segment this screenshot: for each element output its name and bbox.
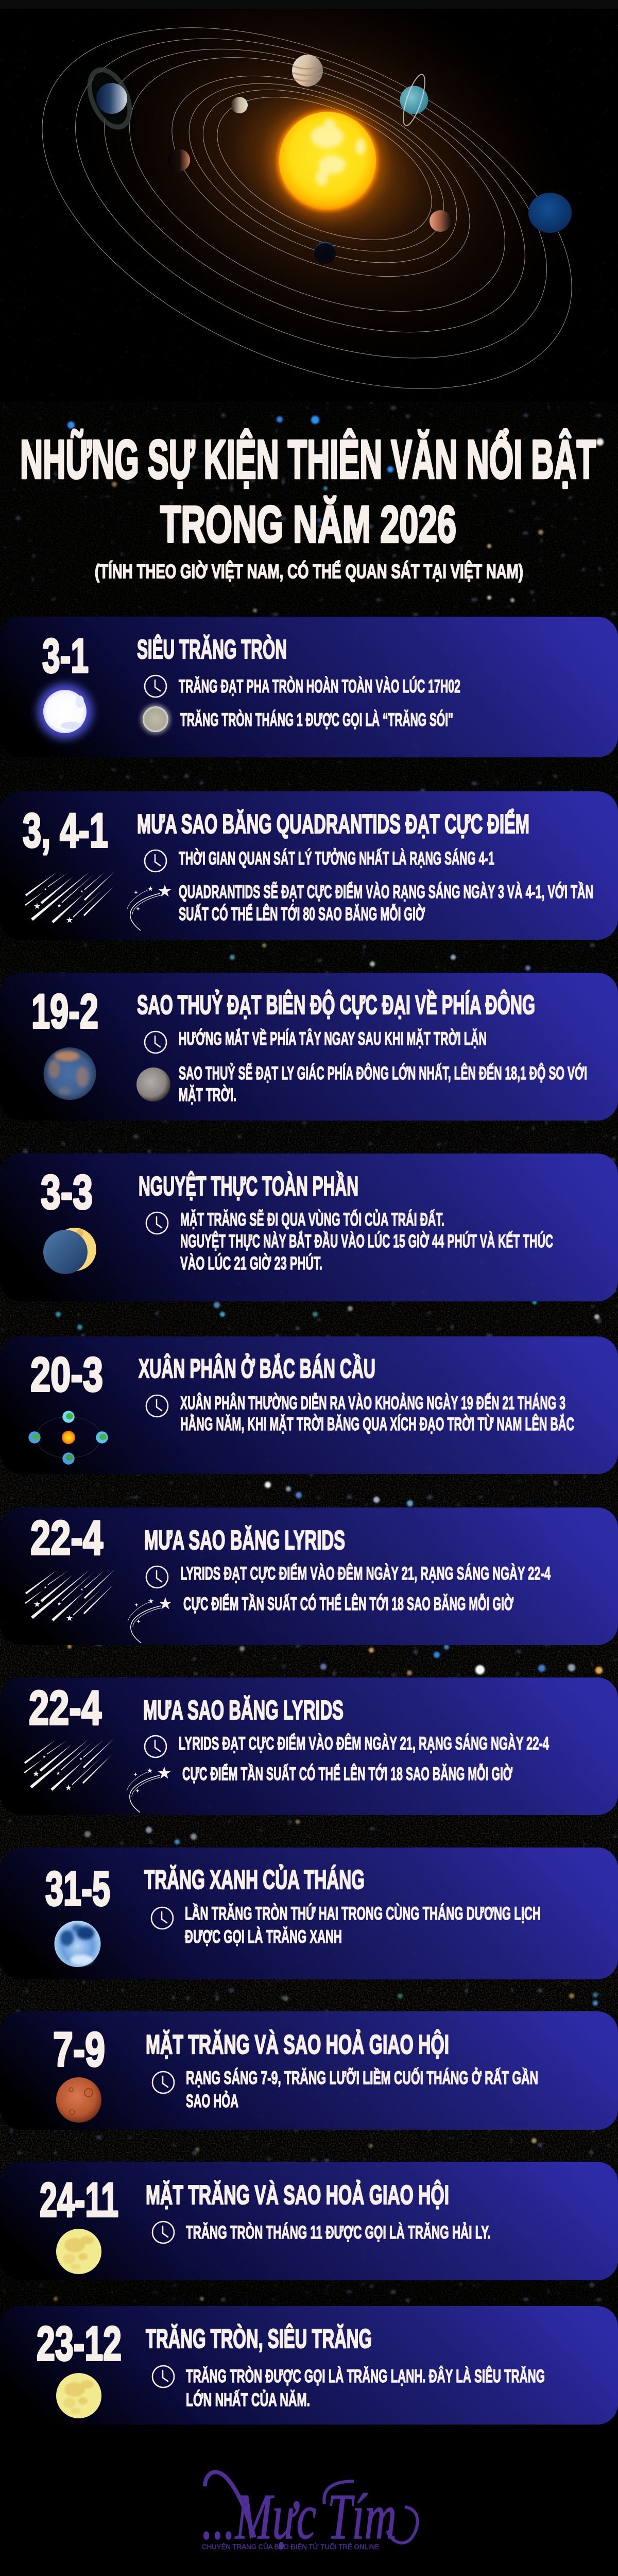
- logo: Mực Tím: CHUYÊN TRANG CỦA BÁO ĐIỆN TỬ TUỔI TRẺ ONLINE: [202, 2542, 380, 2551]
- panel: 3,4-1 Quadrantids: [0, 791, 618, 940]
- planet: earth: [314, 242, 336, 264]
- icon: sun and earth orbit: [28, 1411, 108, 1465]
- detail text: [179, 1063, 587, 1105]
- planet: jupiter: [292, 55, 323, 87]
- event heading: MẶT TRĂNG VÀ SAO HOẢ GIAO HỘI: [146, 2180, 449, 2210]
- date: 23-12: [37, 2316, 122, 2370]
- panel: 23-12 cold super moon: [0, 2306, 618, 2425]
- icon: clock: [145, 1736, 166, 1757]
- icon: clock: [152, 2222, 174, 2243]
- icon: eclipse: [43, 1228, 96, 1274]
- detail text: [180, 1209, 553, 1274]
- detail text: [185, 1903, 541, 1947]
- date: 22-4: [30, 1511, 103, 1565]
- detail text: MẶT TRỜI.: [179, 1084, 236, 1105]
- icon: shooting star: [128, 1597, 171, 1643]
- panel: 22-4 Lyrids repeat: [0, 1677, 618, 1815]
- icon: shooting star: [127, 1767, 170, 1812]
- planet: uranus: [399, 72, 429, 128]
- event heading: MẶT TRĂNG VÀ SAO HOẢ GIAO HỘI: [146, 2029, 449, 2060]
- detail text: SUẤT CÓ THỂ LÊN TỚI 80 SAO BĂNG MỖI GIỜ: [179, 904, 425, 924]
- planet: venus: [430, 210, 451, 232]
- icon: clock: [145, 1031, 166, 1053]
- icon: shooting star: [127, 885, 171, 930]
- detail text: MẶT TRĂNG SẼ ĐI QUA VÙNG TỐI CỦA TRÁI ĐẤT.: [180, 1209, 444, 1230]
- detail text: [179, 882, 593, 924]
- icon: blue moon: [55, 1921, 101, 1967]
- detail text: VÀO LÚC 21 GIỜ 23 PHÚT.: [180, 1253, 322, 1274]
- panel: 3-3 lunar eclipse: [0, 1154, 618, 1301]
- event heading: NGUYỆT THỰC TOÀN PHẦN: [139, 1171, 358, 1201]
- detail text: [186, 2366, 545, 2410]
- panel: 3-1 super full moon: [0, 617, 618, 757]
- event heading: MƯA SAO BĂNG LYRIDS: [144, 1526, 345, 1555]
- main title: TRONG NĂM 2026: [160, 496, 456, 553]
- planet: mercury: [231, 97, 248, 113]
- event heading: SIÊU TRĂNG TRÒN: [137, 634, 287, 665]
- icon: clock: [152, 2366, 174, 2387]
- date: 31-5: [45, 1861, 110, 1916]
- background: night sky: [0, 402, 618, 2321]
- icon: clock: [152, 2072, 174, 2093]
- logo: Mực Tím: [202, 2472, 418, 2553]
- planet: mars: [167, 149, 190, 172]
- icon: clock: [146, 1212, 168, 1234]
- date: 24-11: [40, 2173, 118, 2227]
- planet: neptune: [528, 193, 572, 233]
- date: 3-3: [41, 1165, 93, 1219]
- panel: 31-5 blue moon: [0, 1848, 618, 1979]
- icon: meteor shower: [25, 1569, 115, 1621]
- logo: Mực Tím: ...Mực Tím: [202, 2481, 397, 2553]
- event heading: TRĂNG TRÒN, SIÊU TRĂNG: [146, 2324, 372, 2354]
- event heading: MƯA SAO BĂNG LYRIDS: [143, 1696, 344, 1725]
- hero: solar system illustration: [0, 0, 618, 466]
- icon: yellow moon: [56, 2373, 101, 2418]
- detail text: LỚN NHẤT CỦA NĂM.: [186, 2389, 310, 2410]
- icon: clock: [145, 850, 166, 872]
- date: 20-3: [30, 1347, 103, 1401]
- planet: saturn: [78, 60, 141, 137]
- detail text: [180, 1393, 574, 1434]
- panel: 20-3 spring equinox: [0, 1336, 618, 1474]
- date: 22-4: [29, 1681, 101, 1735]
- main title: [20, 429, 596, 553]
- icon: clock: [146, 1566, 168, 1588]
- event heading: XUÂN PHÂN Ở BẮC BÁN CẦU: [139, 1353, 375, 1384]
- date: 19-2: [31, 984, 98, 1038]
- icon: clock: [151, 1907, 173, 1929]
- icon: Mercury colour: [43, 1047, 96, 1100]
- panel: 19-2 Mercury: [0, 973, 618, 1121]
- detail text: SAO HỎA: [186, 2091, 238, 2111]
- panel: 22-4 Lyrids: [0, 1507, 618, 1645]
- icon: grey moon: [141, 704, 170, 734]
- panel: 7-9 moon and Mars: [0, 2011, 618, 2130]
- event heading: TRĂNG XANH CỦA THÁNG: [144, 1865, 365, 1895]
- icon: clock: [146, 1395, 168, 1417]
- icon: Mercury grey: [136, 1067, 170, 1101]
- sun: [272, 105, 383, 216]
- icon: meteor shower: [25, 871, 115, 923]
- detail text: [186, 2067, 538, 2111]
- icon: clock: [145, 675, 166, 697]
- icon: super moon: [37, 684, 93, 739]
- detail text: ĐƯỢC GỌI LÀ TRĂNG XANH: [185, 1926, 342, 1947]
- icon: Mars: [56, 2077, 101, 2123]
- icon: meteor shower: [24, 1739, 114, 1791]
- date: 3-1: [42, 629, 89, 683]
- panel: 24-11 beaver moon: [0, 2162, 618, 2280]
- date: 7-9: [53, 2022, 105, 2076]
- date: 3, 4-1: [23, 803, 108, 857]
- icon: yellow moon: [56, 2229, 101, 2274]
